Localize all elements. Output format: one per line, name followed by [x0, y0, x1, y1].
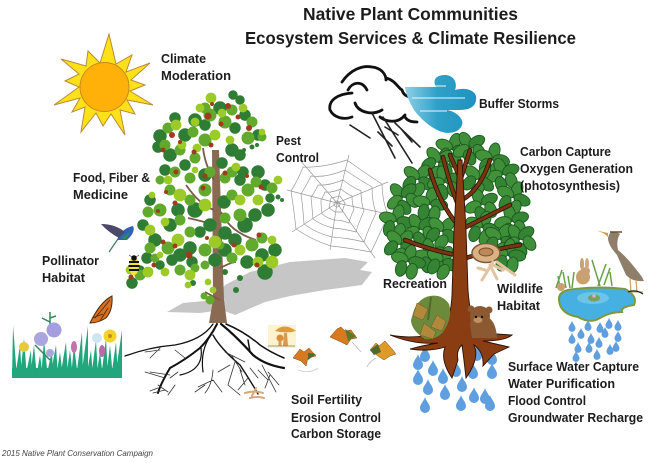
- tree 2: trunk, branches and roots: [390, 150, 520, 378]
- label: climate moderation: [161, 52, 231, 83]
- icon: earthworm: [245, 388, 264, 398]
- tree 1: roots: [125, 324, 284, 395]
- label: food, fiber and medicine: Medicine: [73, 188, 128, 202]
- label: climate moderation: Moderation: [161, 69, 231, 83]
- tree 2: foliage: [375, 124, 544, 285]
- label: water services: Flood Control: [508, 394, 586, 408]
- icon: bee: [128, 255, 140, 275]
- label: food, fiber and medicine: [73, 171, 150, 202]
- label: carbon capture and oxygen generation: Carbon Capture: [520, 145, 611, 159]
- label: soil services: [291, 393, 381, 441]
- icon: fallen autumn leaf 3: [367, 341, 396, 367]
- icon: hummingbird: [101, 224, 134, 252]
- icon: reeds and rabbit: [556, 258, 612, 291]
- icon: storm cloud with rain: [330, 67, 420, 163]
- title: Ecosystem Services & Climate Resilience: [245, 28, 576, 48]
- icon: fallen autumn leaf 1: [293, 348, 318, 372]
- icon: heron: [594, 230, 644, 294]
- pond: water drops: [568, 318, 622, 362]
- tree shadow on ground: [167, 258, 372, 315]
- label: pest control: Pest: [276, 134, 302, 148]
- label: carbon capture and oxygen generation: (photosynthesis): [520, 179, 620, 193]
- icon: monarch butterfly: [90, 296, 112, 323]
- tree 1: trunk and branches: [186, 148, 256, 323]
- label: pest control: Control: [276, 151, 319, 165]
- label: pest control: [276, 134, 319, 165]
- label: soil services: Soil Fertility: [291, 393, 362, 407]
- label: carbon capture and oxygen generation: Oxygen Generation: [520, 162, 633, 176]
- icon: fallen autumn leaf 2: [330, 327, 361, 352]
- label: soil services: Carbon Storage: [291, 427, 381, 441]
- label: wildlife habitat: Habitat: [497, 299, 541, 313]
- tree 1: foliage: [126, 91, 284, 304]
- title: [245, 4, 576, 48]
- label: water services: Surface Water Capture: [508, 360, 639, 374]
- label: soil services: Erosion Control: [291, 411, 381, 425]
- label: climate moderation: Climate: [161, 52, 206, 66]
- label: carbon capture and oxygen generation: [520, 145, 633, 193]
- icon: wind gusts: [405, 75, 476, 133]
- icon: mushrooms: [268, 325, 296, 348]
- label: pollinator habitat: Pollinator: [42, 254, 99, 268]
- icon: sun: [54, 34, 153, 135]
- label: wildlife habitat: Wildlife: [497, 282, 543, 296]
- label: water services: Groundwater Recharge: [508, 411, 643, 425]
- icon: pond: [559, 288, 635, 321]
- label: water services: Water Purification: [508, 377, 615, 391]
- label: food, fiber and medicine: Food, Fiber &: [73, 171, 150, 185]
- title: Native Plant Communities: [303, 4, 518, 24]
- label: water services: [508, 360, 643, 425]
- icon: backpack: [411, 296, 450, 339]
- label: recreation: Recreation: [383, 277, 447, 291]
- label: buffer storms: Buffer Storms: [479, 97, 559, 111]
- label: wildlife habitat: [497, 282, 543, 313]
- label: pollinator habitat: Habitat: [42, 271, 86, 285]
- credit line: 2015 Native Plant Conservation Campaign: [1, 449, 154, 458]
- icon: bird nest: [472, 244, 515, 280]
- icon: wildflower meadow: [12, 312, 122, 378]
- label: pollinator habitat: [42, 254, 99, 285]
- icon: bear cub: [468, 306, 497, 338]
- spider web: [287, 155, 392, 258]
- tree 2: rain drops beneath roots: [413, 345, 497, 413]
